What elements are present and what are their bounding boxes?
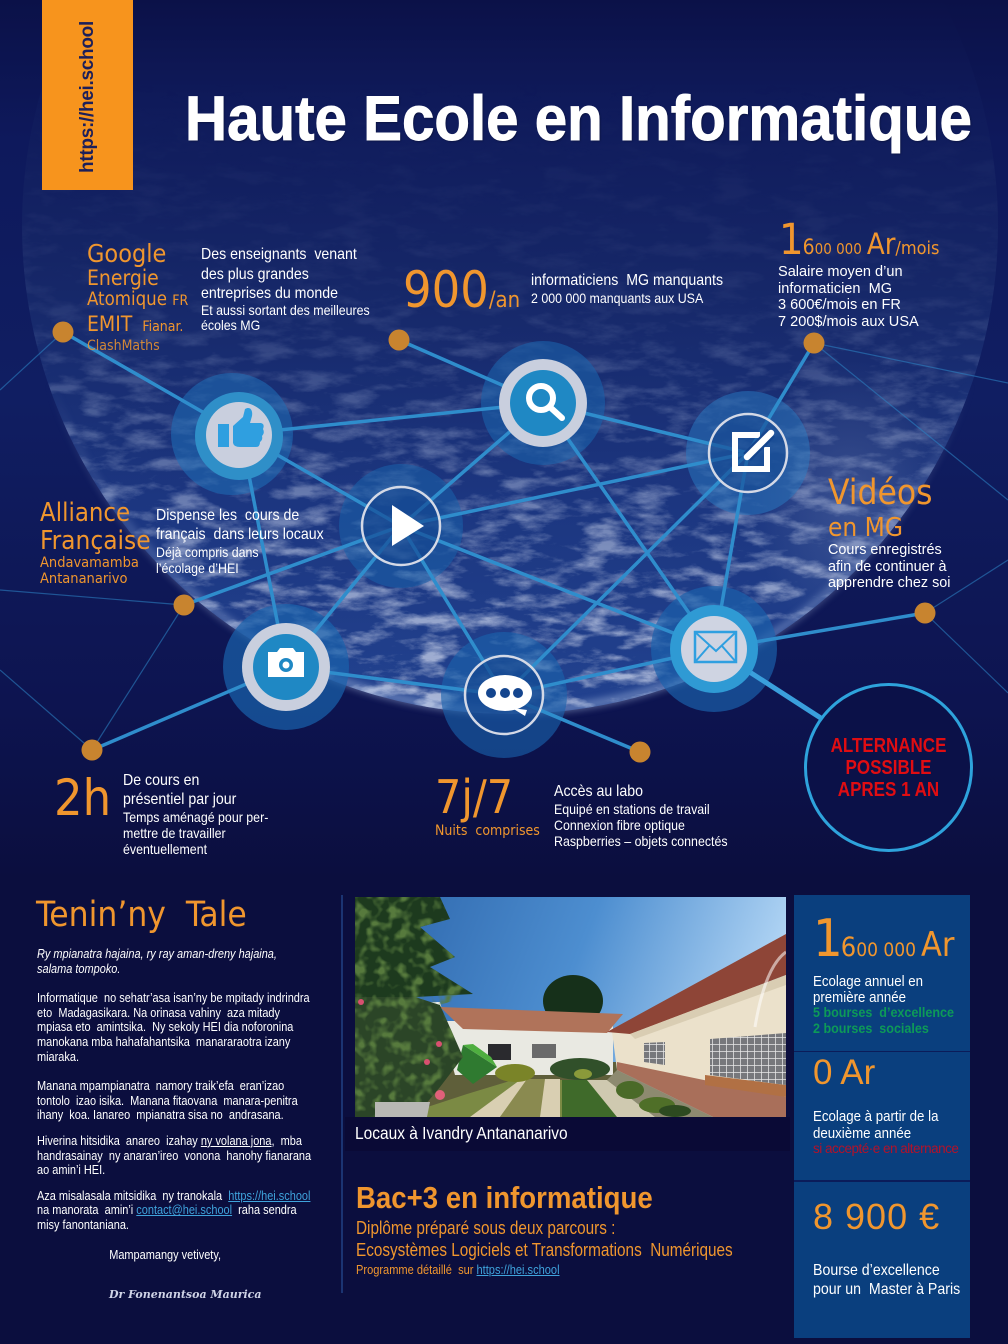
teachers text <box>201 246 370 333</box>
presential text <box>123 772 268 857</box>
missing IT specialists text: informaticiens MG manquants <box>531 272 723 289</box>
caption text: Locaux à Ivandry Antananarivo <box>355 1123 568 1143</box>
signature: Dr Fonenantsoa Maurica <box>109 1288 262 1301</box>
Videos text: Cours enregistrés <box>828 541 942 558</box>
degree text: Diplôme préparé sous deux parcours : <box>356 1218 615 1238</box>
letter body: handrasainay ny anaran’ireo vonona hanohy fianarana <box>37 1149 311 1163</box>
column divider <box>341 895 343 1293</box>
icon: edit <box>709 414 787 492</box>
fee one: Ecolage annuel en <box>813 973 923 990</box>
icon: camera <box>242 623 330 711</box>
degree heading: Bac+3 en informatique <box>356 1180 653 1215</box>
salary text: 7 200$/mois aux USA <box>778 313 919 330</box>
presential text: Temps aménagé pour per- <box>123 809 268 825</box>
degree text: Ecosystèmes Logiciels et Transformations Numériques <box>356 1240 733 1260</box>
French courses text: l’écolage d’HEI <box>156 560 239 576</box>
divider lines <box>794 1051 970 1052</box>
Videos text <box>828 541 950 591</box>
French courses text <box>156 507 324 576</box>
fee two: Ecolage à partir de la <box>813 1108 938 1125</box>
program link: Programme détaillé sur https://hei.school <box>356 1263 560 1277</box>
stat: 2h: 2h <box>54 769 111 827</box>
fee one: 2 bourses sociales <box>813 1020 929 1036</box>
partners block: ClashMaths <box>87 338 160 354</box>
teachers text: Des enseignants venant <box>201 246 357 263</box>
partners block: Google <box>87 239 166 268</box>
letter body: ao amin’i HEI. <box>37 1163 105 1177</box>
stat: salary: 1600 000Ar/mois <box>779 215 940 265</box>
icon: play <box>362 487 440 565</box>
Alliance Francaise: Française <box>40 526 151 556</box>
stat: 7j/7 <box>435 770 540 839</box>
Alliance Francaise <box>40 498 151 587</box>
Videos text: afin de continuer à <box>828 558 946 574</box>
icon: mail <box>670 605 758 693</box>
Videos <box>828 473 933 543</box>
fee one <box>813 909 955 1036</box>
lab access text: Accès au labo <box>554 783 643 800</box>
url tab <box>42 0 133 190</box>
fee two: 0 Ar <box>813 1053 875 1092</box>
degree text <box>356 1218 733 1260</box>
Alliance Francaise: Alliance <box>40 498 130 528</box>
partners block: Atomique FR <box>87 289 188 310</box>
letter body: Mampamangy vetivety, <box>109 1248 221 1262</box>
callout: alternance: APRES 1 AN <box>838 779 939 801</box>
letter body: Hiverina hitsidika anareo izahay ny volana jona, mba <box>37 1134 302 1148</box>
stat: 900 per year: 900/an <box>403 261 520 319</box>
letter body: miaraka. <box>37 1050 79 1064</box>
letter heading: Tenin’ny Tale <box>36 895 247 935</box>
icon: thumbs up <box>195 392 283 480</box>
callout: alternance: POSSIBLE <box>846 757 931 779</box>
letter body <box>37 947 312 1262</box>
url text: https://hei.school <box>77 21 98 173</box>
fee one: 5 bourses d’excellence <box>813 1005 954 1020</box>
stat: 7j/7: 7j/7 <box>435 770 513 824</box>
icon: search <box>499 359 587 447</box>
letter body: na manorata amin’i contact@hei.school raha sendra <box>37 1203 297 1217</box>
teachers text: des plus grandes <box>201 266 309 282</box>
French courses text: français dans leurs locaux <box>156 526 324 543</box>
presential text: mettre de travailler <box>123 825 226 841</box>
partners block: EMIT Fianar. <box>87 312 183 336</box>
letter body: salama tompoko. <box>37 962 120 976</box>
fee three: pour un Master à Paris <box>813 1281 960 1298</box>
lab access text <box>554 783 728 849</box>
salary text: Salaire moyen d’un <box>778 263 903 280</box>
lab access text: Equipé en stations de travail <box>554 801 710 817</box>
missing IT specialists text <box>531 272 723 306</box>
connector lines <box>63 332 925 752</box>
fee two: deuxième année <box>813 1125 911 1142</box>
letter body: Informatique no sehatr’asa isan’ny be mpitady indrindra <box>37 991 310 1005</box>
Videos: en MG <box>828 513 903 543</box>
photo caption <box>345 1117 790 1151</box>
fee two: si accepté·e en alternance <box>813 1141 958 1156</box>
teachers text: Et aussi sortant des meilleures <box>201 302 370 318</box>
fee one: première année <box>813 988 906 1006</box>
fee three: Bourse d’excellence <box>813 1262 940 1279</box>
fee three <box>813 1196 960 1298</box>
letter body: Ry mpianatra hajaina, ry ray aman-dreny hajaina, <box>37 947 277 961</box>
salary text: 3 600€/mois en FR <box>778 296 901 313</box>
icon: chat <box>465 656 543 734</box>
lab access text: Connexion fibre optique <box>554 817 685 833</box>
photo: campus building <box>355 897 786 1117</box>
presential text: présentiel par jour <box>123 791 236 808</box>
title: Haute Ecole en Informatique <box>185 84 972 154</box>
salary text: informaticien MG <box>778 280 892 297</box>
letter body: tontolo izao isika. Manana fitaovana manara-penitra <box>37 1094 298 1108</box>
letter body: eto Madagasikara. Na orinasa vahiny aza mitady <box>37 1006 280 1020</box>
letter body: Aza misalasala mitsidika ny tranokala https://hei.school <box>37 1189 310 1203</box>
Videos text: apprendre chez soi <box>828 574 950 591</box>
callout: alternance: ALTERNANCE <box>831 735 946 757</box>
thin outer lines <box>0 332 1008 750</box>
degree block <box>356 1180 733 1277</box>
letter body: Manana mpampianatra namory traik’efa eran’izao <box>37 1079 284 1093</box>
teachers text: entreprises du monde <box>201 285 338 302</box>
teachers text: écoles MG <box>201 317 260 333</box>
presential text: De cours en <box>123 772 199 789</box>
fee two <box>813 1053 958 1156</box>
node dots <box>52 322 936 762</box>
partners block: Energie <box>87 266 159 290</box>
French courses text: Déjà compris dans <box>156 544 259 560</box>
presential text: éventuellement <box>123 841 207 857</box>
fee three: 8 900 € <box>813 1196 940 1237</box>
stat: 7j/7: Nuits comprises <box>435 823 540 839</box>
lab access text: Raspberries – objets connectés <box>554 833 728 849</box>
background globe <box>0 0 1008 800</box>
salary text <box>778 263 919 330</box>
letter body: manokana mba hahafahantsika manararaotra izany <box>37 1035 290 1049</box>
letter body: misy fanontaniana. <box>37 1218 129 1232</box>
Videos: Vidéos <box>828 473 933 513</box>
letter body: ihany koa. Ianareo mpianatra sisa no andrasana. <box>37 1108 284 1122</box>
halos <box>171 341 810 758</box>
callout: alternance <box>804 683 973 852</box>
panel: fees <box>794 895 970 1338</box>
letter body: mpiasa eto amintsika. Ny sekoly HEI dia noforonina <box>37 1020 293 1034</box>
network diagram <box>0 322 1008 762</box>
French courses text: Dispense les cours de <box>156 507 299 524</box>
Alliance Francaise: Antananarivo <box>40 571 128 587</box>
partners block <box>87 239 188 354</box>
Alliance Francaise: Andavamamba <box>40 555 139 571</box>
fee one: 1600 000Ar <box>813 909 955 969</box>
panel: letter <box>36 895 312 1301</box>
missing IT specialists text: 2 000 000 manquants aux USA <box>531 290 703 306</box>
